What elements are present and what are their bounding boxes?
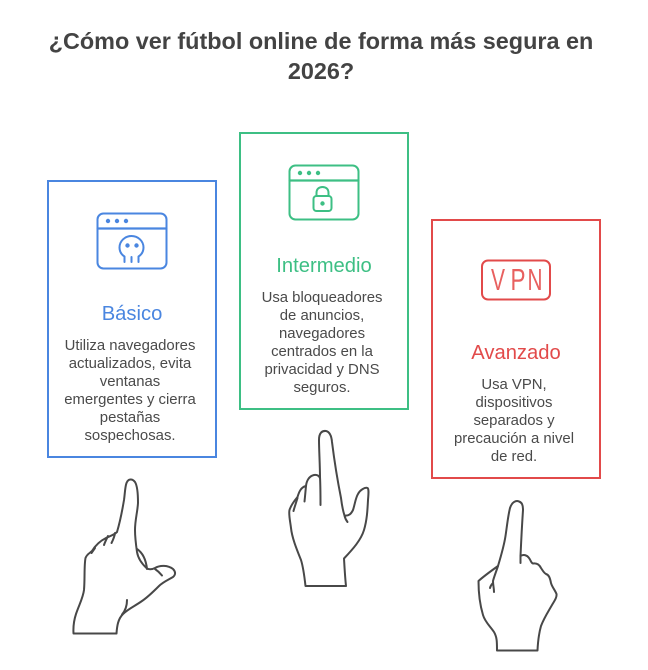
icon: hand pointing up, centre	[289, 431, 368, 586]
panel: Intermedio	[239, 132, 409, 410]
text: Avanzado description: precaución a nivel	[454, 431, 574, 447]
text: Básico description: ventanas	[100, 374, 160, 390]
text: Intermedio description: centrados en la	[271, 344, 373, 360]
text: Avanzado description: de red.	[491, 449, 537, 465]
icon: VPN badge: V	[491, 262, 505, 297]
text: Intermedio description: privacidad y DNS	[264, 362, 380, 378]
heading: Básico: Básico	[102, 303, 162, 325]
title: 2026?	[288, 58, 354, 84]
panel: Básico	[47, 180, 217, 458]
heading: Intermedio: Intermedio	[276, 255, 372, 277]
text: Intermedio description: seguros.	[293, 380, 351, 396]
icon: browser with padlock	[290, 166, 358, 220]
icon: hand pointing up, right	[478, 501, 557, 650]
text: Intermedio description: navegadores	[279, 326, 365, 342]
icon: VPN badge: P	[510, 262, 526, 297]
panel: Avanzado	[431, 219, 601, 479]
title	[49, 28, 593, 84]
text: Intermedio description	[262, 290, 382, 396]
text: Básico description: emergentes y cierra	[64, 392, 196, 408]
text: Avanzado description: Usa VPN,	[481, 377, 547, 393]
text: Básico description: sospechosas.	[84, 428, 176, 444]
text: Avanzado description: dispositivos	[476, 395, 552, 411]
icon: browser with skull	[98, 214, 166, 268]
text: Básico description: actualizados, evita	[69, 356, 191, 372]
text: Avanzado description	[454, 377, 574, 465]
text: Avanzado description: separados y	[473, 413, 555, 429]
icon: hand pointing up, left	[73, 479, 175, 634]
text: Intermedio description: Usa bloqueadores	[262, 290, 382, 306]
icon: VPN badge: N	[528, 262, 542, 297]
heading: Avanzado: Avanzado	[471, 342, 561, 364]
text: Básico description	[64, 338, 196, 444]
icon: VPN badge	[482, 260, 550, 300]
title: ¿Cómo ver fútbol online de forma más segura en	[49, 28, 593, 54]
text: Básico description: pestañas	[100, 410, 160, 426]
text: Básico description: Utiliza navegadores	[65, 338, 195, 354]
text: Intermedio description: de anuncios,	[280, 308, 364, 324]
